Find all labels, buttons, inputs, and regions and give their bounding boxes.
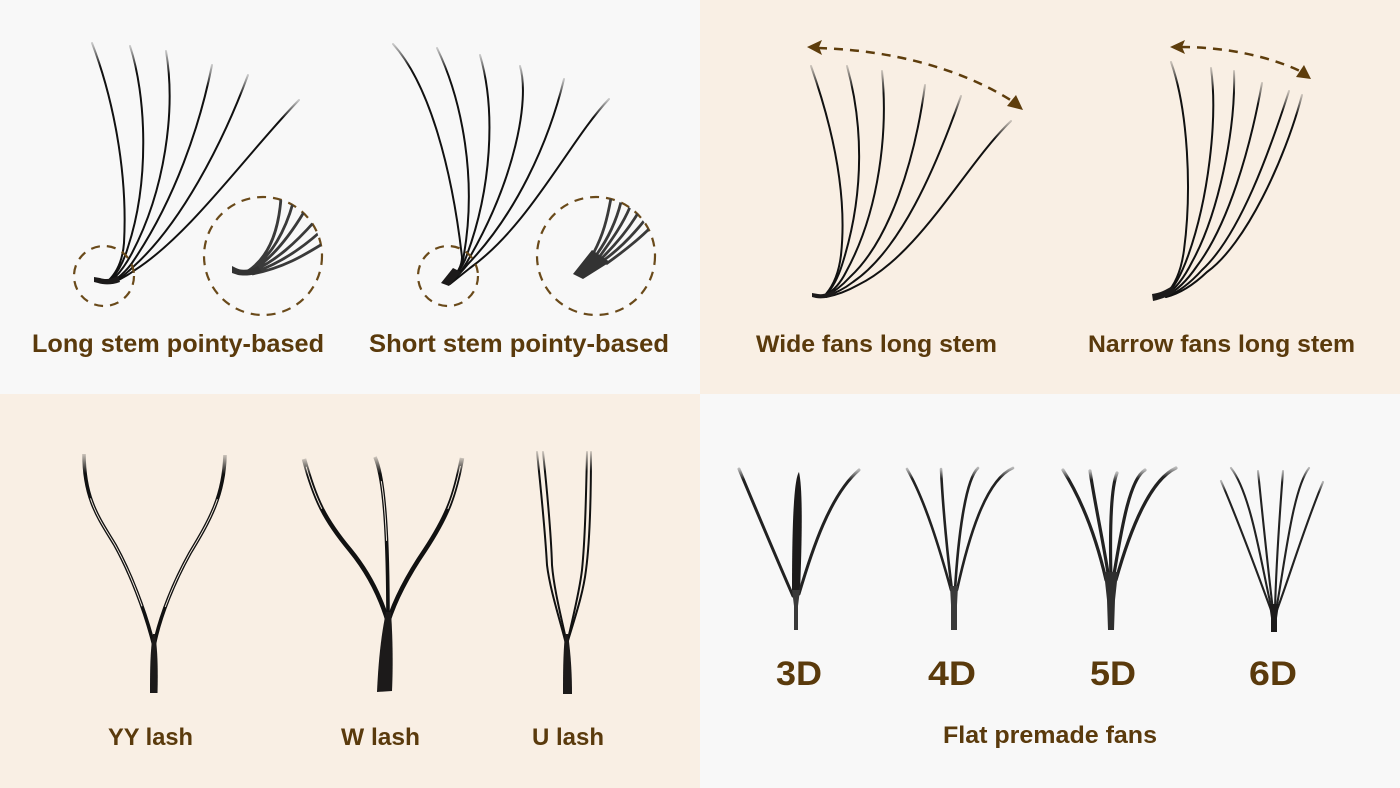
label: wide fans long stem: Wide fans long stem bbox=[756, 331, 997, 358]
label: 4D: 4D bbox=[928, 655, 976, 693]
lash: 3D flat fan bbox=[739, 469, 859, 630]
lash: W lash bbox=[304, 457, 462, 692]
lash: 4D flat fan bbox=[907, 468, 1013, 630]
callout: magnified long stem base bbox=[204, 197, 324, 315]
panel: stem pointy-based lashes bbox=[34, 42, 668, 357]
label: 3D: 3D bbox=[776, 655, 822, 693]
label: W lash: W lash bbox=[341, 724, 420, 751]
lash: YY lash bbox=[84, 454, 225, 693]
label: 5D: 5D bbox=[1090, 655, 1136, 693]
label: U lash: U lash bbox=[532, 724, 604, 751]
lash: 6D flat fan bbox=[1221, 468, 1323, 632]
lash: wide fan long stem bbox=[811, 66, 1011, 298]
panel: YY W U lashes bbox=[0, 394, 700, 788]
lash: long stem pointy-based fan bbox=[92, 43, 299, 284]
label: 6D: 6D bbox=[1249, 655, 1297, 693]
label: flat premade fans: Flat premade fans bbox=[943, 722, 1157, 749]
label: short stem pointy-based: Short stem pointy-based bbox=[369, 330, 669, 358]
lash: short stem pointy-based fan bbox=[393, 44, 609, 286]
lash: 5D flat fan bbox=[1063, 468, 1176, 630]
arrow: narrow fan spread bbox=[1170, 40, 1311, 79]
label: long stem pointy-based: Long stem pointy-based bbox=[32, 330, 324, 358]
label: YY lash: YY lash bbox=[108, 724, 193, 751]
callout: small dashed circle long stem bbox=[74, 246, 134, 306]
callout: magnified short stem base bbox=[537, 197, 655, 315]
lash: narrow fan long stem bbox=[1152, 62, 1302, 301]
arrow: wide fan spread bbox=[807, 40, 1023, 110]
panel: fan width comparison bbox=[700, 0, 1400, 394]
lash: U lash bbox=[537, 452, 591, 694]
label: narrow fans long stem: Narrow fans long stem bbox=[1088, 331, 1355, 358]
callout: small dashed circle short stem bbox=[418, 246, 478, 306]
panel: flat premade fans bbox=[700, 394, 1400, 788]
